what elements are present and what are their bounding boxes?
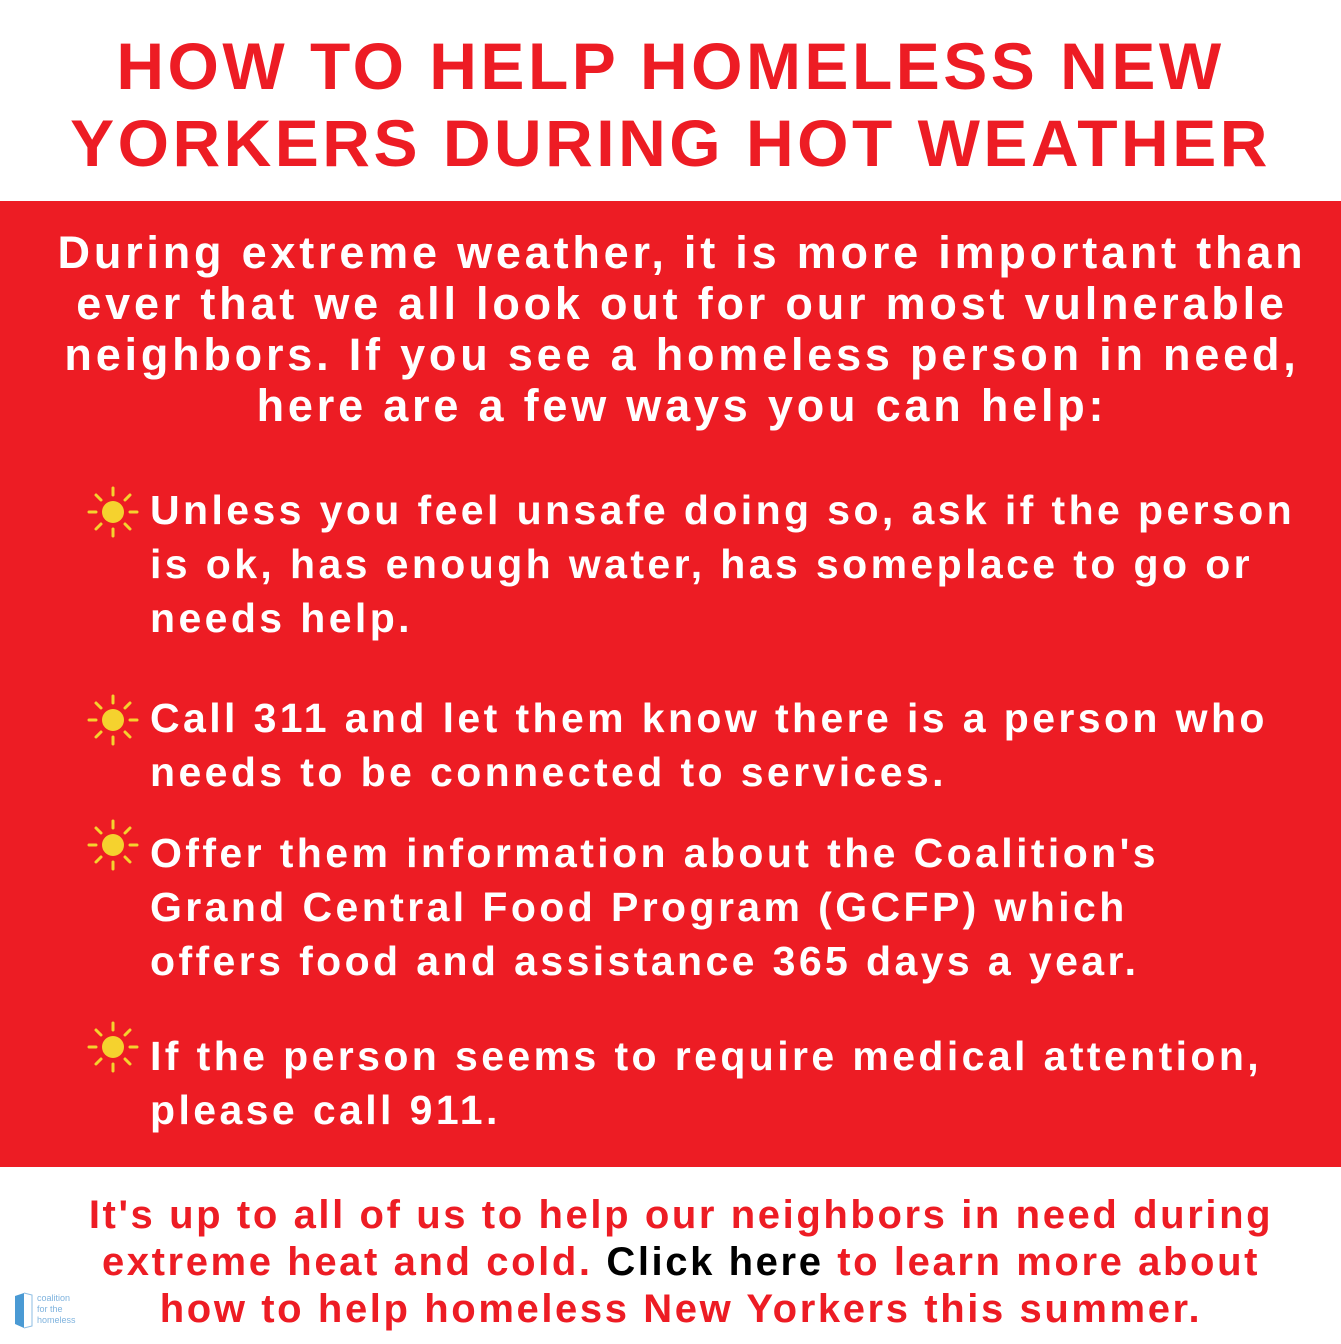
- bullet 2: needs to be connected to services.: [150, 749, 947, 795]
- bullet 4: [150, 1033, 1262, 1133]
- title: YORKERS DURING HOT WEATHER: [70, 106, 1271, 180]
- icon: sun 1: [88, 486, 138, 538]
- intro text: [58, 227, 1306, 431]
- bullet 1: [150, 487, 1295, 641]
- bullet 4: If the person seems to require medical attention,: [150, 1033, 1262, 1079]
- bullet 3: [150, 830, 1159, 984]
- icon: sun 4: [88, 1022, 138, 1072]
- title: [70, 29, 1271, 180]
- bullet 1: is ok, has enough water, has someplace to go or: [150, 541, 1253, 587]
- panel: red content: [0, 201, 1341, 1167]
- icon: sun 2: [88, 694, 138, 746]
- intro text: ever that we all look out for our most vulnerable: [76, 278, 1288, 329]
- bullet 1: needs help.: [150, 595, 413, 641]
- intro text: neighbors. If you see a homeless person in need,: [64, 329, 1300, 380]
- footer text: extreme heat and cold. Click here to learn more about: [102, 1240, 1260, 1284]
- footer text: how to help homeless New Yorkers this summer.: [160, 1287, 1202, 1331]
- bullet 2: [150, 695, 1268, 795]
- bullet 2: Call 311 and let them know there is a person who: [150, 695, 1268, 741]
- bullet 4: please call 911.: [150, 1087, 501, 1133]
- bullet 3: offers food and assistance 365 days a year.: [150, 938, 1139, 984]
- logo: [15, 1292, 76, 1328]
- icon: sun 3: [88, 820, 138, 870]
- footer text: [89, 1193, 1273, 1331]
- logo: for the: [37, 1304, 63, 1314]
- bullet 3: Grand Central Food Program (GCFP) which: [150, 884, 1128, 930]
- logo: homeless: [37, 1315, 76, 1325]
- intro text: During extreme weather, it is more important than: [58, 227, 1306, 278]
- logo: coalition: [37, 1293, 70, 1303]
- intro text: here are a few ways you can help:: [257, 380, 1107, 431]
- title: HOW TO HELP HOMELESS NEW: [116, 29, 1225, 103]
- bullet 1: Unless you feel unsafe doing so, ask if the person: [150, 487, 1295, 533]
- bullet 3: Offer them information about the Coalition's: [150, 830, 1159, 876]
- footer text: It's up to all of us to help our neighbors in need during: [89, 1193, 1273, 1237]
